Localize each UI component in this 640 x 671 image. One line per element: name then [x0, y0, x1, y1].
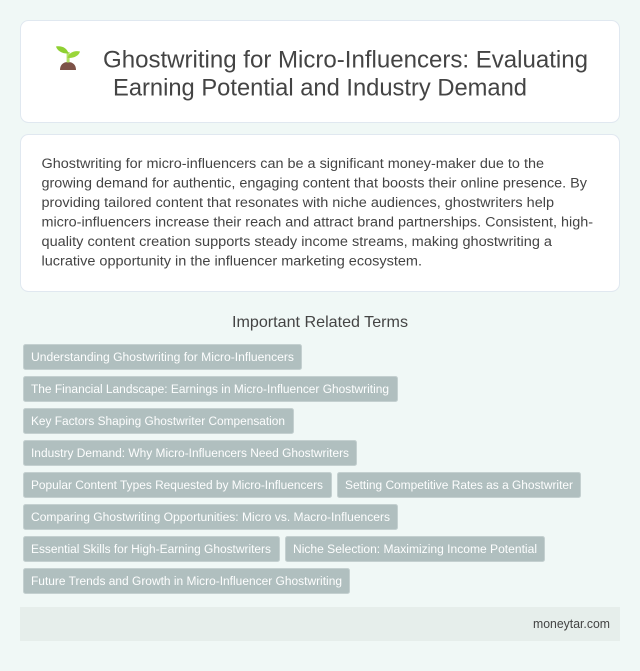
- tag: financial landscape: [24, 376, 398, 402]
- tag: key factors: [24, 408, 294, 434]
- tag: industry demand: [24, 440, 356, 466]
- tag: future trends: Future Trends and Growth in Micro-Influencer Ghostwriting: [31, 574, 342, 588]
- panel: title card: [20, 20, 620, 122]
- tag: industry demand: Industry Demand: Why Micro-Influencers Need Ghostwriters: [31, 446, 349, 460]
- tag: niche selection: Niche Selection: Maximizing Income Potential: [293, 542, 537, 556]
- text block: introduction: quality content creation supports steady income streams, making ghostwriting a: [42, 234, 552, 250]
- panel: intro text card: [20, 134, 620, 292]
- tag: competitive rates: [338, 472, 580, 498]
- tag: understanding: Understanding Ghostwriting for Micro-Influencers: [31, 350, 294, 364]
- footer: moneytar.com: [533, 616, 610, 631]
- tag: competitive rates: Setting Competitive Rates as a Ghostwriter: [345, 478, 573, 492]
- text block: introduction: Ghostwriting for micro-influencers can be a significant money-maker due to the: [42, 156, 544, 172]
- tag list: [24, 344, 580, 594]
- tag: essential skills: [24, 536, 280, 562]
- heading: important related terms: Important Related Terms: [232, 314, 408, 331]
- tag: popular content types: Popular Content Types Requested by Micro-Influencers: [31, 478, 323, 492]
- text block: introduction: growing demand for authentic, engaging content that boosts their online presence. By: [42, 176, 588, 192]
- text block: introduction: [42, 156, 593, 270]
- icon: seedling: [56, 46, 80, 70]
- text block: introduction: lucrative opportunity in the influencer marketing ecosystem.: [42, 254, 422, 270]
- title: Ghostwriting for Micro-Influencers: Evaluating: [103, 46, 588, 74]
- tag: essential skills: Essential Skills for High-Earning Ghostwriters: [31, 542, 271, 556]
- tag: financial landscape: The Financial Landscape: Earnings in Micro-Influencer Ghostwriting: [31, 382, 389, 396]
- tag: comparing opportunities: Comparing Ghostwriting Opportunities: Micro vs. Macro-Influencers: [31, 510, 390, 524]
- footer: [20, 607, 620, 641]
- text block: introduction: micro-influencers increase their reach and attract brand partnerships. Consistent, high-: [42, 214, 593, 230]
- tag: understanding: [24, 344, 302, 370]
- title: [103, 46, 588, 102]
- tag: popular content types: [24, 472, 332, 498]
- title: Earning Potential and Industry Demand: [113, 74, 527, 102]
- tag: niche selection: [286, 536, 544, 562]
- tag: comparing opportunities: [24, 504, 398, 530]
- text block: introduction: providing tailored content that resonates with niche audiences, ghostwriters help: [42, 195, 554, 211]
- tag: future trends: [24, 568, 350, 594]
- tag: key factors: Key Factors Shaping Ghostwriter Compensation: [31, 414, 285, 428]
